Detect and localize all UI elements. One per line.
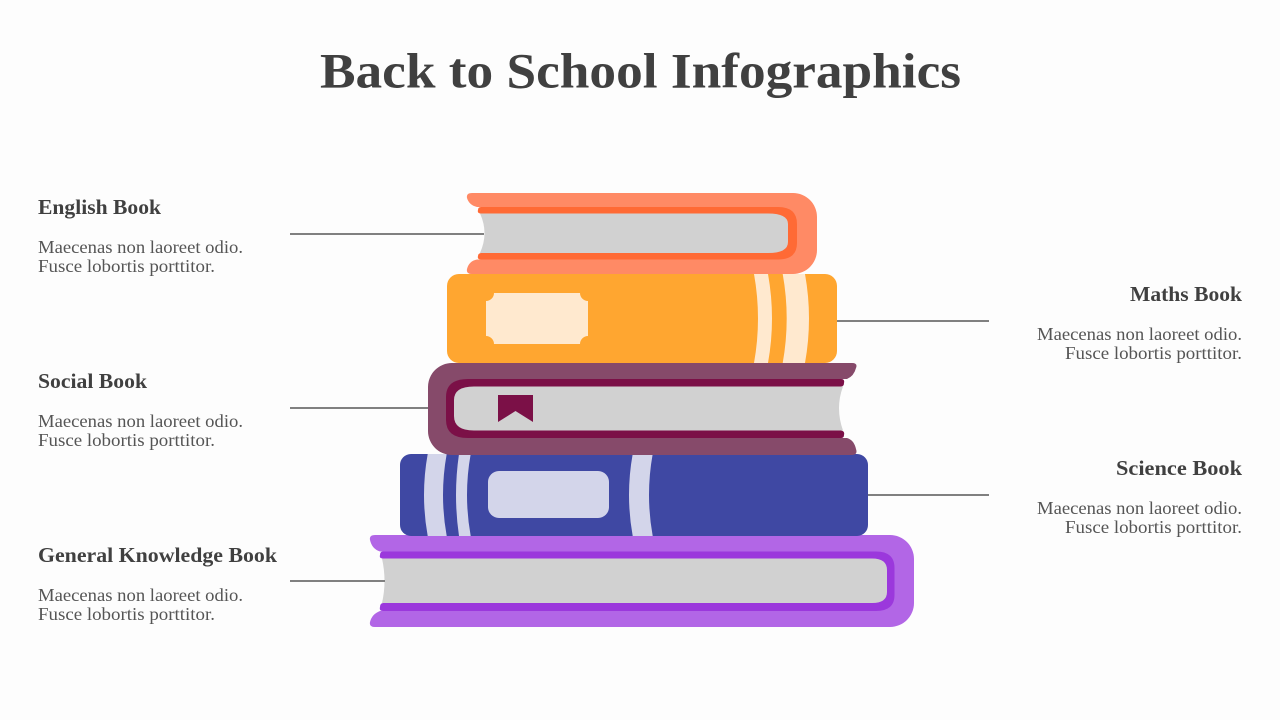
text block: general knowledge book: General Knowledge Book — [38, 543, 277, 567]
text block: social book — [38, 369, 243, 450]
text block: science book: Maecenas non laoreet odio. — [1037, 498, 1242, 518]
text block: general knowledge book: Fusce lobortis porttitor. — [38, 604, 215, 624]
text block: english book: Fusce lobortis porttitor. — [38, 256, 215, 276]
text block: english book: Maecenas non laoreet odio. — [38, 237, 243, 257]
connector: social — [290, 407, 428, 409]
title: Back to School Infographics — [320, 42, 961, 98]
text block: maths book: Maths Book — [1130, 282, 1242, 306]
book: general knowledge — [370, 535, 914, 627]
text block: maths book: Maecenas non laoreet odio. — [1037, 324, 1242, 344]
text block: science book — [1037, 456, 1242, 537]
text block: english book — [38, 195, 243, 276]
text block: general knowledge book: Maecenas non laoreet odio. — [38, 585, 243, 605]
connector: maths — [837, 320, 989, 322]
text block: maths book: Fusce lobortis porttitor. — [1065, 343, 1242, 363]
text block: maths book — [1037, 282, 1242, 363]
icon: bookmark — [498, 395, 533, 422]
text block: social book: Fusce lobortis porttitor. — [38, 430, 215, 450]
book: social — [428, 363, 856, 455]
text block: social book: Maecenas non laoreet odio. — [38, 411, 243, 431]
label plate — [486, 293, 588, 344]
text block: science book: Science Book — [1116, 456, 1242, 480]
text block: social book: Social Book — [38, 369, 147, 393]
book: english — [467, 193, 817, 274]
label plate — [488, 471, 609, 518]
spine stripes — [424, 454, 653, 536]
connector: general knowledge — [290, 580, 385, 582]
text block: english book: English Book — [38, 195, 161, 219]
connector: science — [868, 494, 989, 496]
book stack — [370, 193, 914, 627]
spine stripes — [754, 274, 809, 363]
book: science — [400, 454, 868, 536]
book: maths — [447, 274, 837, 363]
text block: general knowledge book — [38, 543, 277, 624]
connector: english — [290, 233, 484, 235]
text block: science book: Fusce lobortis porttitor. — [1065, 517, 1242, 537]
